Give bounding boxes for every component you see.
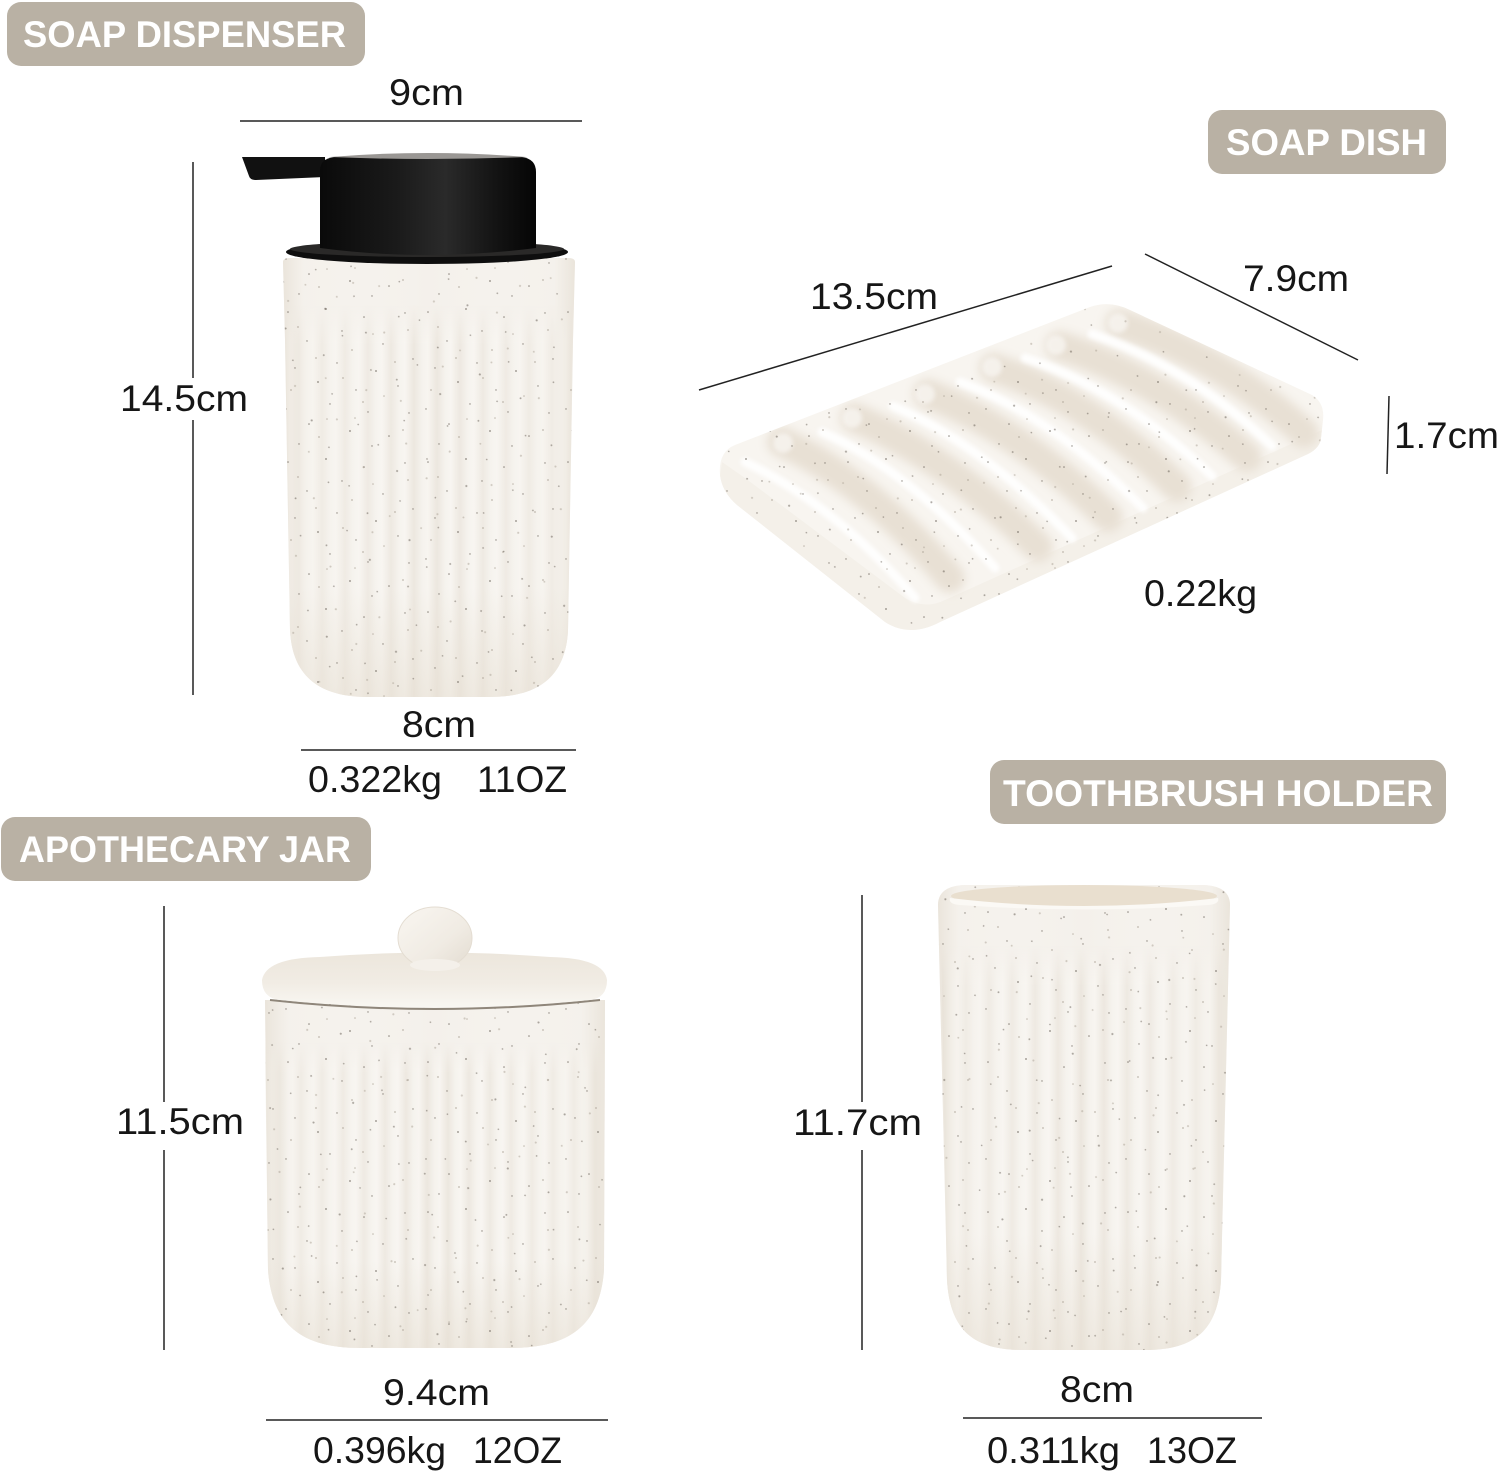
label: toothbrush holder [990,760,1446,824]
holder rim opening [950,885,1218,910]
dimension: dish height: 1.7cm [1394,415,1499,456]
label: apothecary jar [1,817,371,881]
dimension: dish length [699,266,1112,390]
label: soap dispenser [7,2,365,66]
text: jar weight and capacity: 0.396kg [313,1430,446,1471]
text: holder weight and capacity [987,1430,1237,1471]
text: jar weight and capacity [313,1430,562,1471]
label: soap dish [1208,110,1446,174]
dimension: jar width: 9.4cm [383,1372,490,1413]
jar lid [262,952,607,1009]
black pump collar [286,240,568,264]
text: dish weight: 0.22kg [1144,573,1257,614]
dimension: jar height [116,906,244,1350]
dimension: dish height [1387,396,1499,474]
dimension: dispenser height: 14.5cm [120,378,248,419]
front face of dish [720,459,1296,624]
dimension: dish width: 7.9cm [1243,258,1349,299]
text: dispenser weight and capacity: 0.322kg [308,759,442,800]
dimension: dispenser top width: 9cm [389,72,464,113]
text: jar weight and capacity: 12OZ [473,1430,562,1471]
dimension: dispenser height [120,162,248,695]
product: apothecary jar [262,907,607,1348]
dimension: jar height: 11.5cm [116,1101,244,1142]
text: dispenser weight and capacity: 11OZ [477,759,567,800]
ridges [745,334,1272,598]
black pump cap and spout [242,153,536,255]
grooves [782,324,1304,578]
product: soap dispenser [242,153,575,697]
dimension: holder height [793,895,922,1350]
jar knob [398,907,472,971]
dimension: dish length: 13.5cm [810,276,938,317]
dimension: holder width: 8cm [1060,1369,1134,1410]
ceramic body [283,258,575,697]
label: apothecary jar: APOTHECARY JAR [19,829,351,870]
product: soap dish [720,304,1323,630]
label: soap dish: SOAP DISH [1226,122,1427,163]
dimension: dish width [1145,254,1358,360]
label: toothbrush holder: TOOTHBRUSH HOLDER [1003,773,1433,814]
jar body [265,1000,605,1348]
text: holder weight and capacity: 0.311kg [987,1430,1120,1471]
dimension: dispenser base width: 8cm [402,704,476,745]
product: toothbrush holder [938,885,1230,1350]
dimension: holder height: 11.7cm [793,1102,922,1143]
text: holder weight and capacity: 13OZ [1147,1430,1237,1471]
text: dispenser weight and capacity [308,759,567,800]
label: soap dispenser: SOAP DISPENSER [23,14,346,55]
holder body [938,885,1230,1350]
dimples [773,313,1128,453]
